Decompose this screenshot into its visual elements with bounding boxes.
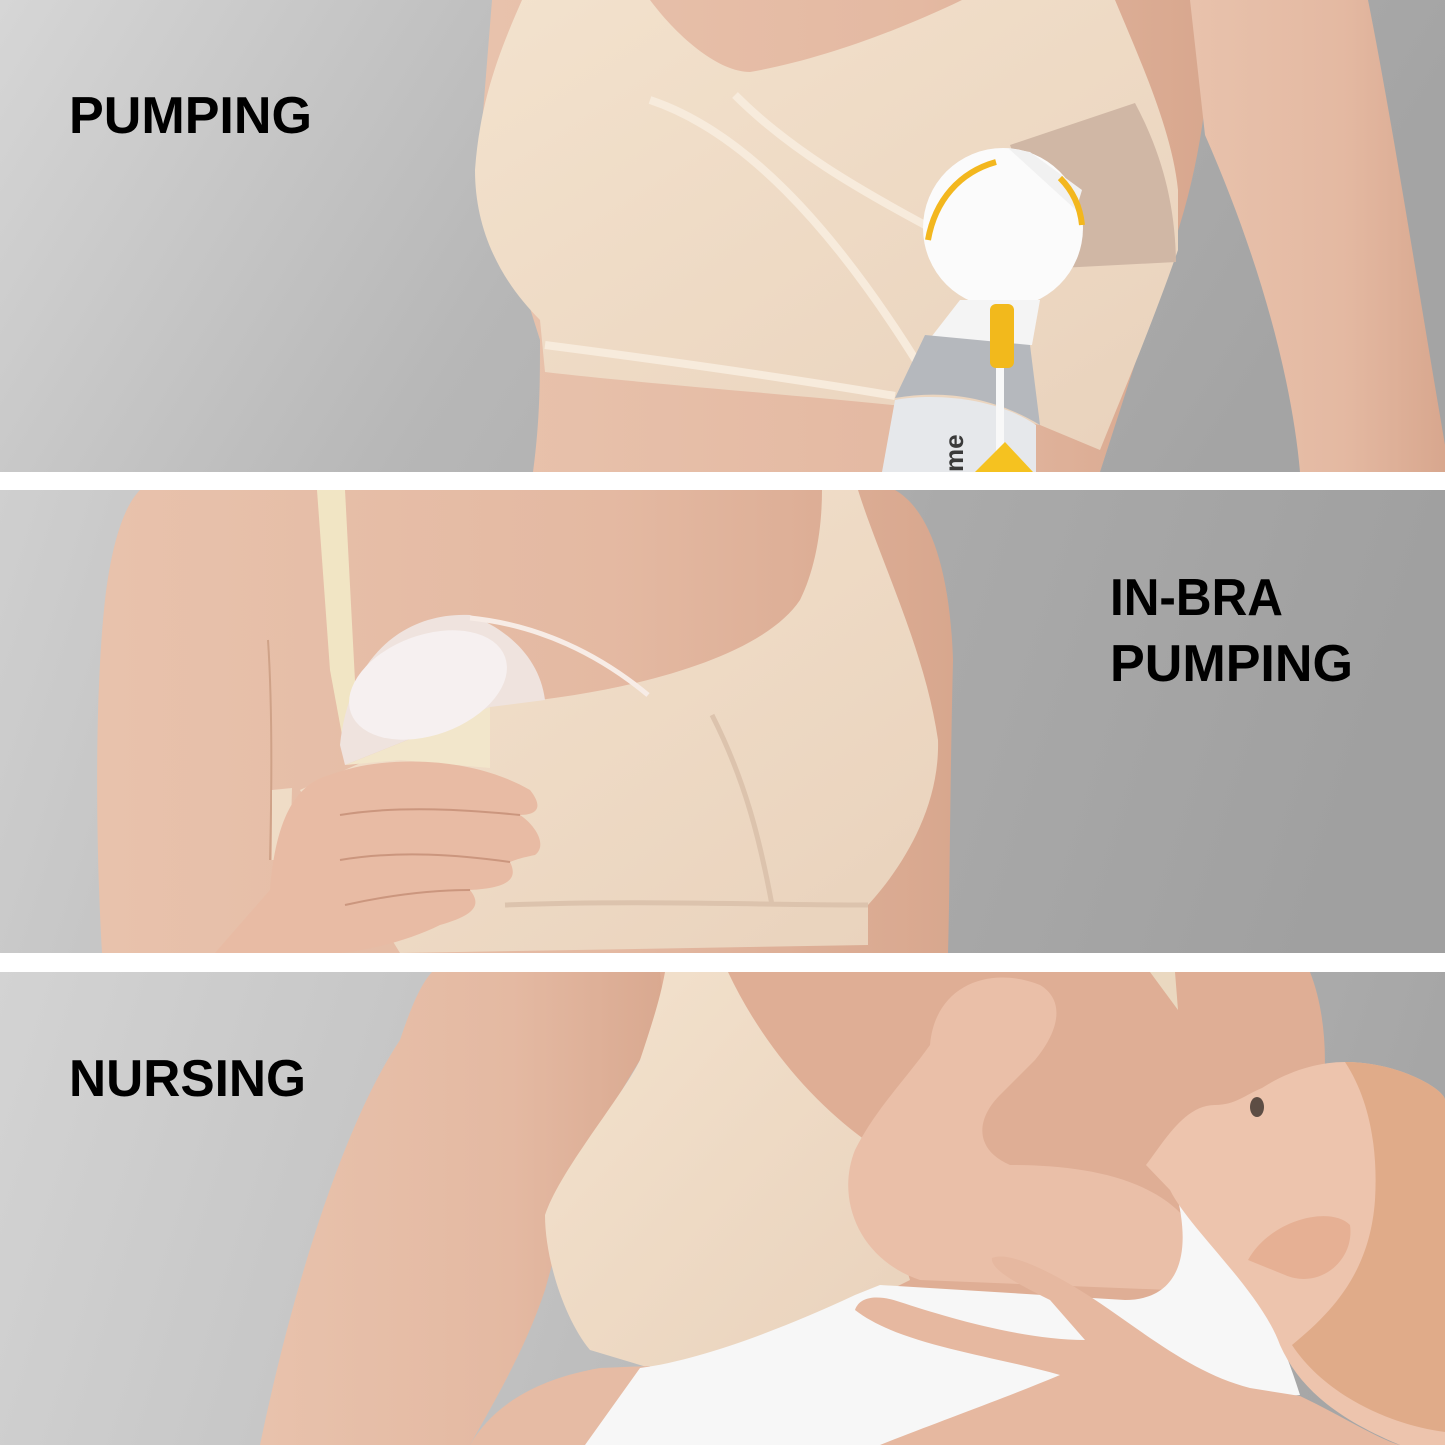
bra	[545, 972, 910, 1368]
baby eye	[1250, 1097, 1264, 1117]
baby hair	[1292, 1062, 1445, 1432]
bra	[475, 0, 1178, 450]
baby ear	[1248, 1216, 1350, 1279]
bottle label: me	[939, 434, 969, 472]
hand finger lines	[340, 809, 520, 905]
far strap	[1150, 972, 1178, 1010]
bra folded flap	[345, 707, 490, 768]
heading: in-bra pumping: IN-BRA	[1110, 569, 1283, 627]
bra mesh opening	[1010, 103, 1176, 268]
hand	[274, 762, 540, 942]
right arm	[1190, 0, 1445, 472]
panel: in-bra pumping	[0, 490, 1445, 953]
heading: in-bra pumping	[1113, 579, 1350, 682]
bra gather	[505, 715, 868, 905]
baby leg	[470, 1366, 650, 1445]
heading: pumping: PUMPING	[69, 87, 312, 145]
icon: breast pump	[882, 148, 1083, 472]
bra fold lines	[545, 95, 925, 396]
baby arm	[848, 978, 1200, 1290]
bra	[300, 490, 938, 953]
arm crease	[268, 640, 271, 860]
left strap	[317, 490, 356, 735]
icon: wearable breast shield	[334, 610, 648, 765]
baby	[470, 978, 1445, 1445]
heading: nursing: NURSING	[69, 1050, 306, 1108]
panel: nursing	[0, 972, 1445, 1445]
torso and arms skin	[97, 490, 953, 953]
upper arm	[260, 972, 680, 1445]
chest and far arm skin	[728, 972, 1325, 1300]
heading: in-bra pumping: PUMPING	[1110, 635, 1353, 693]
bra side band	[272, 788, 292, 860]
baby head	[1146, 1062, 1445, 1445]
torso skin	[480, 0, 1210, 472]
baby vest	[585, 1188, 1300, 1445]
panel: pumping	[0, 0, 1445, 472]
supporting hand	[855, 1257, 1400, 1445]
